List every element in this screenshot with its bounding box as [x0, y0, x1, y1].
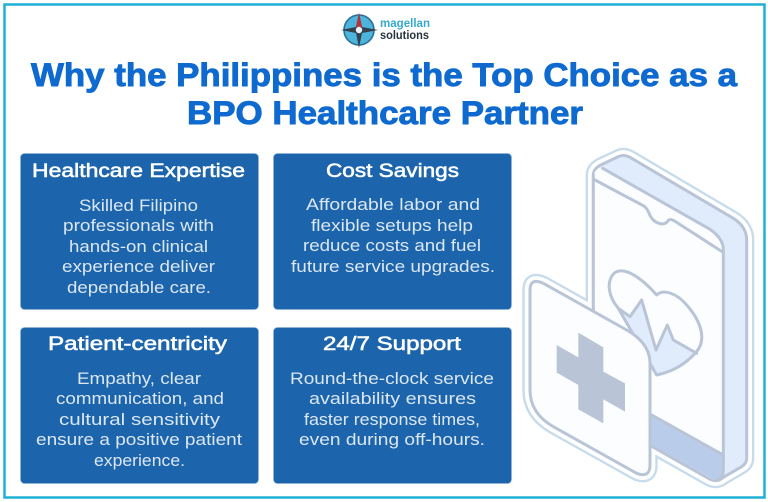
panel: 24/7 Support: [274, 328, 512, 484]
text block: Healthcare Expertise body: Skilled Filipino: [79, 197, 198, 215]
text block: Healthcare Expertise body: professionals with: [63, 217, 214, 235]
panel: Healthcare Expertise: [20, 154, 258, 310]
text block: Cost Savings body: reduce costs and fuel: [303, 237, 481, 255]
text block: Patient-centricity body: communication, and: [56, 390, 224, 408]
panel: Patient-centricity: [20, 328, 258, 484]
title: BPO Healthcare Partner: [187, 95, 583, 131]
text block: Cost Savings body: future service upgrades.: [291, 258, 495, 276]
text block: 24/7 Support body: availability ensures: [309, 390, 476, 408]
text block: Healthcare Expertise body: dependable care.: [67, 279, 211, 297]
text block: Patient-centricity body: experience.: [94, 452, 185, 470]
text block: 24/7 Support body: even during off-hours.: [299, 431, 485, 449]
icon: medical cross: [557, 333, 625, 423]
text block: Healthcare Expertise body: [62, 197, 216, 297]
icon: heart with pulse line: [609, 271, 702, 375]
logo wordmark: solutions: [380, 30, 429, 42]
text block: Patient-centricity body: ensure a positive patient: [36, 431, 242, 449]
text block: Patient-centricity body: [36, 370, 242, 470]
phone body: [593, 155, 747, 481]
heading: Healthcare Expertise: Healthcare Expertise: [32, 160, 245, 182]
logo wordmark: magellan: [380, 18, 430, 30]
text block: 24/7 Support body: Round-the-clock service: [290, 370, 494, 388]
text block: 24/7 Support body: [290, 370, 494, 449]
icon: compass: [341, 13, 378, 48]
text block: Patient-centricity body: cultural sensitivity: [59, 411, 221, 429]
title: [31, 57, 737, 131]
title: Why the Philippines is the Top Choice as a: [31, 57, 737, 93]
illustration: phone with heart and medical cross card: [530, 155, 747, 481]
heading: Patient-centricity: Patient-centricity: [48, 333, 227, 355]
text block: Healthcare Expertise body: hands-on clinical: [69, 238, 208, 256]
sticker outline halo: [530, 155, 747, 481]
text block: Patient-centricity body: Empathy, clear: [77, 370, 202, 388]
medical card: [530, 281, 650, 475]
text block: Cost Savings body: [291, 196, 495, 276]
text block: Cost Savings body: Affordable labor and: [306, 196, 480, 214]
logo: Magellan Solutions: [341, 13, 430, 48]
text block: Healthcare Expertise body: experience deliver: [62, 258, 216, 276]
panel: Cost Savings: [274, 154, 512, 310]
text block: Cost Savings body: flexible setups help: [311, 217, 473, 235]
text block: 24/7 Support body: faster response times,: [304, 411, 480, 429]
heading: 24/7 Support: 24/7 Support: [323, 333, 462, 355]
logo wordmark: [380, 18, 430, 42]
heading: Cost Savings: Cost Savings: [326, 160, 459, 182]
